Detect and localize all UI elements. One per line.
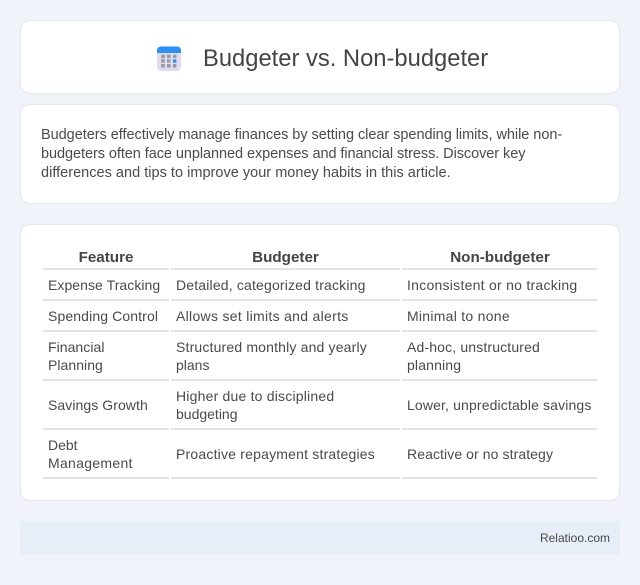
- header panel: [20, 20, 620, 94]
- row: financial planning: Structured monthly and yearly: [176, 339, 367, 355]
- row: savings growth: Savings Growth: [48, 397, 148, 413]
- comparison table panel: [20, 224, 620, 501]
- intro paragraph: differences and tips to improve your money habits in this article.: [41, 165, 451, 181]
- row: spending control: Minimal to none: [407, 308, 510, 324]
- table header row: Feature: [79, 249, 133, 266]
- row: spending control: [48, 308, 510, 324]
- row: expense tracking: Detailed, categorized tracking: [176, 277, 366, 293]
- intro paragraph: Budgeters effectively manage finances by setting clear spending limits, while non-: [41, 127, 562, 143]
- intro paragraph: [41, 127, 562, 181]
- row: financial planning: plans: [176, 357, 209, 373]
- row: financial planning: Planning: [48, 357, 103, 373]
- row: debt management: Proactive repayment strategies: [176, 446, 375, 462]
- table header row: [79, 249, 550, 266]
- footer bar: [20, 521, 620, 555]
- row: savings growth: Higher due to disciplined: [176, 388, 334, 404]
- row: expense tracking: Expense Tracking: [48, 277, 160, 293]
- row: debt management: [48, 437, 553, 471]
- icon: calendar: [157, 46, 181, 71]
- row: financial planning: [48, 339, 540, 373]
- title: Budgeter vs. Non-budgeter: [203, 45, 488, 72]
- row: expense tracking: [48, 277, 577, 293]
- row: financial planning: planning: [407, 357, 461, 373]
- row: financial planning: Financial: [48, 339, 104, 355]
- intro paragraph: budgeters often face unplanned expenses and financial stress. Discover key: [41, 146, 525, 162]
- row: debt management: Debt: [48, 437, 78, 453]
- intro text panel: [20, 104, 620, 204]
- row: savings growth: [48, 388, 591, 422]
- table header row: Budgeter: [252, 249, 319, 266]
- row: debt management: Management: [48, 455, 133, 471]
- row: debt management: Reactive or no strategy: [407, 446, 553, 462]
- row: spending control: Allows set limits and alerts: [176, 308, 349, 324]
- row: expense tracking: Inconsistent or no tracking: [407, 277, 577, 293]
- row: savings growth: Lower, unpredictable savings: [407, 397, 591, 413]
- row: financial planning: Ad-hoc, unstructured: [407, 339, 540, 355]
- table header row: Non-budgeter: [450, 249, 550, 266]
- row: spending control: Spending Control: [48, 308, 158, 324]
- row: savings growth: budgeting: [176, 406, 238, 422]
- footer credit: Relatioo.com: [540, 531, 610, 545]
